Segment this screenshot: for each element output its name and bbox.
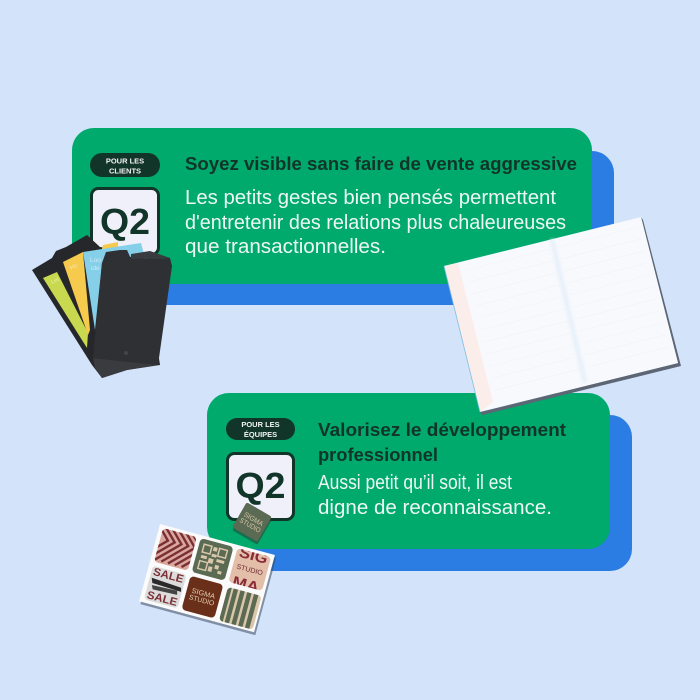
sticker: QR code (192, 538, 234, 581)
icon: open lined notebook (444, 217, 681, 415)
icon: sticker sheet (139, 524, 276, 636)
ruled lines left page (466, 249, 580, 390)
sticker: SIG studio MA (229, 548, 270, 590)
badge: pour les equipes (226, 418, 295, 440)
sticker: sale: SALE (152, 566, 185, 586)
text block: teams: digne de reconnaissance. (318, 497, 552, 519)
infographic canvas (32, 128, 681, 636)
icon: fan of black card holders: Loo (90, 257, 101, 264)
icon: small sigma sticker: SIGMA (242, 512, 264, 528)
quarter tile Q2 (228, 454, 294, 520)
blue cover edge (444, 266, 480, 412)
text block: teams (318, 472, 552, 519)
quarter tile Q2 (92, 188, 158, 254)
sticker: stripes (219, 587, 262, 630)
icon: fan of black card holders: Let (50, 277, 61, 286)
sticker: sale: SALE (145, 589, 179, 609)
sticker: sigma studio wood: SIGMA (191, 588, 216, 601)
icon: fan of black card holders: Ho (69, 263, 79, 272)
yellow card (63, 252, 90, 335)
sticker: SIG studio MA: SIG (237, 544, 270, 568)
text block: clients (185, 187, 566, 258)
heading: teams: Valorisez le développement (318, 420, 566, 440)
heading: clients: Soyez visible sans faire de vente aggressive (185, 154, 577, 174)
lime card (43, 272, 88, 348)
green card (207, 393, 610, 549)
panel: teams card (207, 393, 632, 571)
badge: pour les equipes: ÉQUIPES (244, 430, 277, 439)
green card (72, 128, 592, 284)
quarter tile Q2: Q2 (100, 201, 150, 242)
layered holder bases (93, 358, 158, 378)
sticker: SIG studio MA: STUDIO (236, 564, 264, 577)
front black holder (93, 250, 172, 365)
blue backing panel (94, 151, 614, 305)
blue backing panel (229, 415, 632, 571)
icon: fan of black card holders: ide (91, 265, 100, 272)
ruled lines right page (558, 227, 668, 367)
sticker: sigma studio wood (181, 576, 223, 618)
icon: small sigma sticker: STUDIO (238, 517, 262, 535)
sticker: sigma studio wood: STUDIO (188, 594, 215, 608)
text block: clients: Les petits gestes bien pensés permettent (185, 187, 556, 209)
sticker: sale (144, 566, 186, 608)
notebook shadow (480, 217, 681, 415)
sticker: chevron pattern (154, 528, 196, 570)
quarter tile Q2: Q2 (236, 465, 286, 506)
badge: pour les clients (90, 153, 160, 177)
back holder frame (32, 235, 160, 378)
badge: pour les clients: CLIENTS (109, 166, 141, 176)
pink endpaper strip (444, 263, 493, 412)
icon: fan of black card holders (32, 235, 172, 378)
sheet (139, 524, 275, 632)
text block: teams: Aussi petit qu’il soit, il est (318, 472, 512, 494)
panel: clients card (72, 128, 614, 305)
badge: pour les clients: POUR LES (106, 156, 144, 166)
heading: teams: professionnel (318, 445, 438, 465)
heading: teams (318, 420, 566, 465)
sheet shadow (140, 527, 276, 635)
badge: pour les equipes: POUR LES (241, 420, 280, 429)
icon: small sigma sticker (231, 502, 273, 545)
sky card (83, 243, 144, 330)
text block: clients: d'entretenir des relations plus chaleureuses (185, 212, 566, 234)
sticker: SIG studio MA: MA (230, 573, 261, 597)
text block: clients: que transactionnelles. (185, 236, 386, 258)
notebook pages (444, 217, 678, 412)
spine shade (550, 239, 587, 383)
